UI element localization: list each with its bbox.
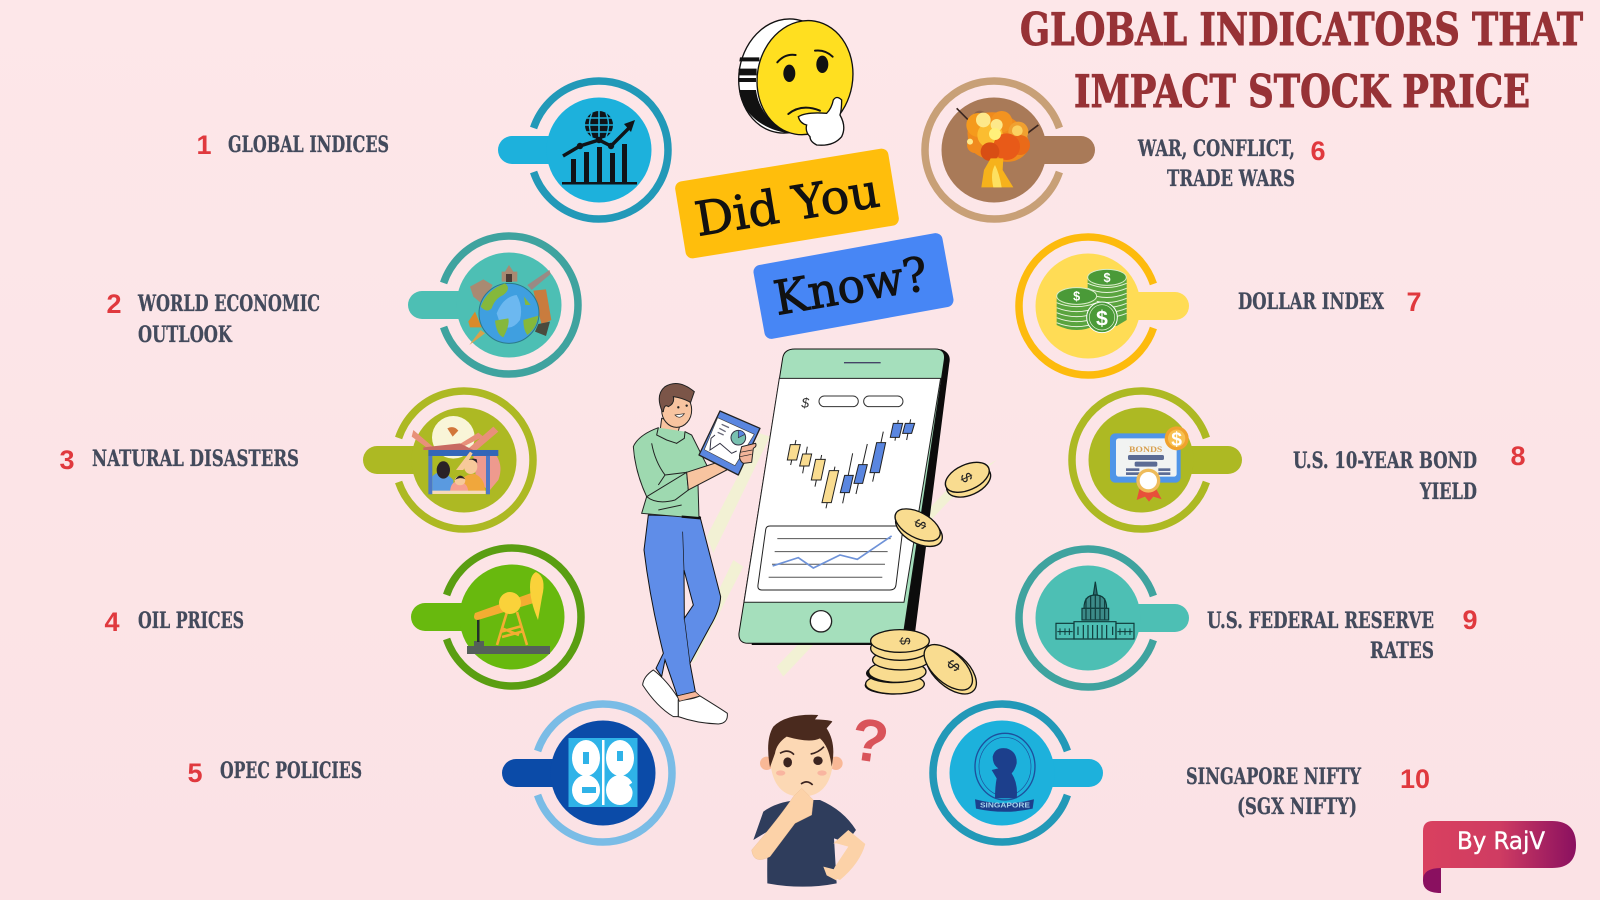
badge: global indices [498, 81, 668, 219]
icon: OPEC logo [568, 738, 638, 807]
icon: bond certificate: BONDS [1129, 444, 1163, 454]
ribbon: by RajV: By RajV [1457, 827, 1546, 855]
badge: bond yield [1072, 391, 1242, 529]
number 9: 9 [1462, 605, 1478, 635]
icon: merlion emblem [975, 733, 1035, 812]
icon: capitol building [1056, 582, 1134, 639]
illustration: thinking boy with question mark [752, 705, 893, 887]
icon: thinking emoji [730, 11, 862, 145]
panel: indicator 9 us federal reserve rates [1019, 549, 1478, 687]
icon: stacks of dollar coins: $ [1103, 271, 1111, 285]
number 2: 2 [106, 289, 122, 319]
number 5: 5 [187, 758, 203, 788]
coins: $ [910, 516, 929, 532]
panel: indicator 9 us federal reserve rates: RATES [1370, 638, 1434, 664]
badge: know?: Know? [770, 247, 932, 327]
question mark: ? [847, 705, 893, 777]
label: war, conflict, trade wars: WAR, CONFLICT, [1137, 136, 1295, 162]
number 8: 8 [1510, 441, 1526, 471]
icon: oil pumpjack [467, 572, 550, 654]
number 6: 6 [1310, 136, 1326, 166]
label: us federal reserve rates: U.S. FEDERAL RESERVE [1207, 608, 1434, 634]
number 1: 1 [196, 130, 212, 160]
panel: indicator 2 world economic outlook [106, 236, 578, 374]
icon: globe and rising bar chart [562, 111, 637, 184]
badge: opec policies [502, 704, 672, 842]
number 4: 4 [104, 607, 120, 637]
panel: indicator 8 us 10-year bond yield: YIELD [1419, 479, 1477, 505]
badge: know? [752, 232, 955, 340]
icon: merlion emblem: SINGAPORE [980, 800, 1030, 809]
panel: indicator 10 singapore nifty: (SGX NIFTY) [1237, 794, 1357, 820]
trader figure [633, 383, 760, 724]
illustration: smartphone, trader and coins [633, 349, 997, 724]
badge: natural disasters [363, 391, 533, 529]
label: singapore nifty (sgx nifty): SINGAPORE NIFTY [1186, 764, 1361, 790]
panel: indicator 6 war conflict trade wars: TRADE WARS [1167, 166, 1295, 192]
badge: did you [674, 148, 900, 259]
icon: bond certificate: $ [1171, 430, 1182, 451]
panel: indicator 2 world economic outlook: OUTLOOK [138, 322, 233, 348]
line chart card [758, 526, 903, 590]
panel: indicator 7 dollar index [1019, 237, 1422, 375]
title [1020, 3, 1583, 118]
badge: singapore nifty [933, 704, 1103, 842]
label: us 10-year bond yield: U.S. 10-YEAR BOND [1293, 448, 1477, 474]
label: oil prices: OIL PRICES [138, 608, 244, 634]
badge: world economic outlook [408, 236, 578, 374]
panel: indicator 10 singapore nifty [933, 704, 1430, 842]
badge: war and conflict [925, 81, 1095, 219]
decorative light beams [690, 433, 997, 677]
ribbon: by RajV [1423, 821, 1576, 893]
icon: bond certificate [1110, 426, 1189, 502]
badge: oil prices [411, 548, 581, 686]
panel: indicator 1 global indices [196, 81, 668, 219]
trousers [644, 515, 721, 696]
coins: $ [898, 637, 914, 645]
panel: indicator 3 natural disasters [59, 391, 533, 529]
badge: federal reserve [1019, 549, 1189, 687]
icon: globe with landmarks [468, 265, 551, 345]
coins: $ [943, 656, 964, 675]
front shoe [678, 696, 727, 724]
label: opec policies: OPEC POLICIES [220, 758, 362, 784]
panel: indicator 5 opec policies [187, 704, 672, 842]
number 10: 10 [1400, 764, 1430, 794]
label: global indices: GLOBAL INDICES [228, 132, 389, 158]
label: dollar index: DOLLAR INDEX [1238, 289, 1385, 315]
label: world economic outlook: WORLD ECONOMIC [137, 291, 320, 317]
candlestick chart [787, 419, 915, 508]
panel: indicator 6 war conflict trade wars [925, 81, 1326, 219]
badge: dollar index [1019, 237, 1189, 375]
icon: explosion [957, 108, 1038, 187]
icon: family sheltering under table [412, 416, 500, 494]
upper body and tablet [633, 383, 760, 518]
icon: stacks of dollar coins: $ [1073, 290, 1080, 304]
label: natural disasters: NATURAL DISASTERS [92, 446, 299, 472]
panel: indicator 8 us 10-year bond yield [1072, 391, 1526, 529]
coins [865, 456, 995, 703]
panel: indicator 4 oil prices [104, 548, 581, 686]
number 7: 7 [1406, 287, 1422, 317]
phone [739, 349, 950, 645]
phone: $ [800, 394, 809, 410]
back shoe [643, 670, 678, 717]
badge: did you: Did You [691, 164, 883, 248]
coins: $ [956, 470, 976, 486]
icon: stacks of dollar coins [1057, 269, 1127, 333]
icon: stacks of dollar coins: $ [1096, 306, 1108, 330]
number 3: 3 [59, 445, 75, 475]
